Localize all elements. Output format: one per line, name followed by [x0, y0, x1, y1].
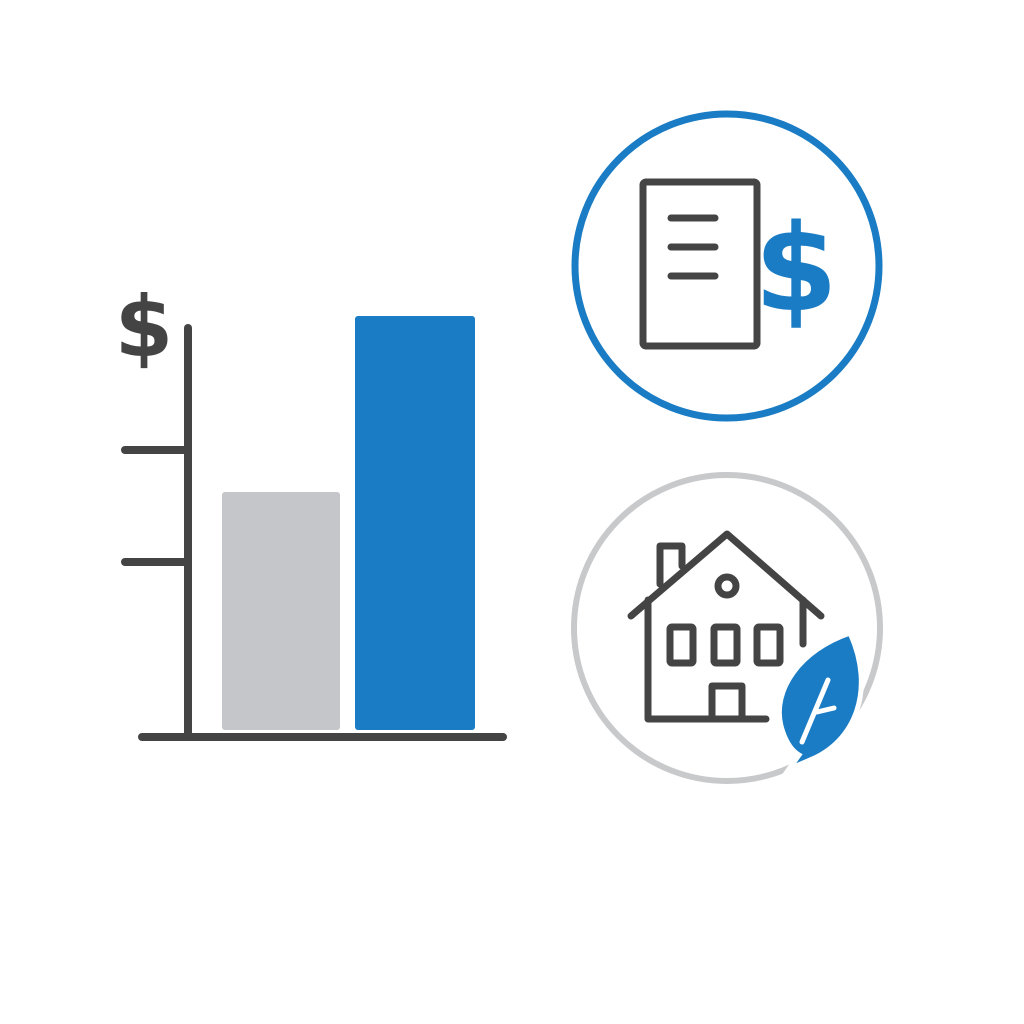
icon: dollar sign axis label: $: [115, 278, 173, 376]
icon: invoice cost circle: [575, 114, 879, 418]
house: [631, 534, 821, 719]
document: [643, 182, 757, 346]
dollar sign: $: [754, 200, 838, 339]
bar chart: [115, 278, 503, 737]
icon: eco house circle: [574, 475, 880, 781]
leaf: [779, 633, 861, 769]
axes: [125, 328, 503, 737]
blue bar: [355, 316, 475, 730]
gray bar: [222, 492, 340, 730]
